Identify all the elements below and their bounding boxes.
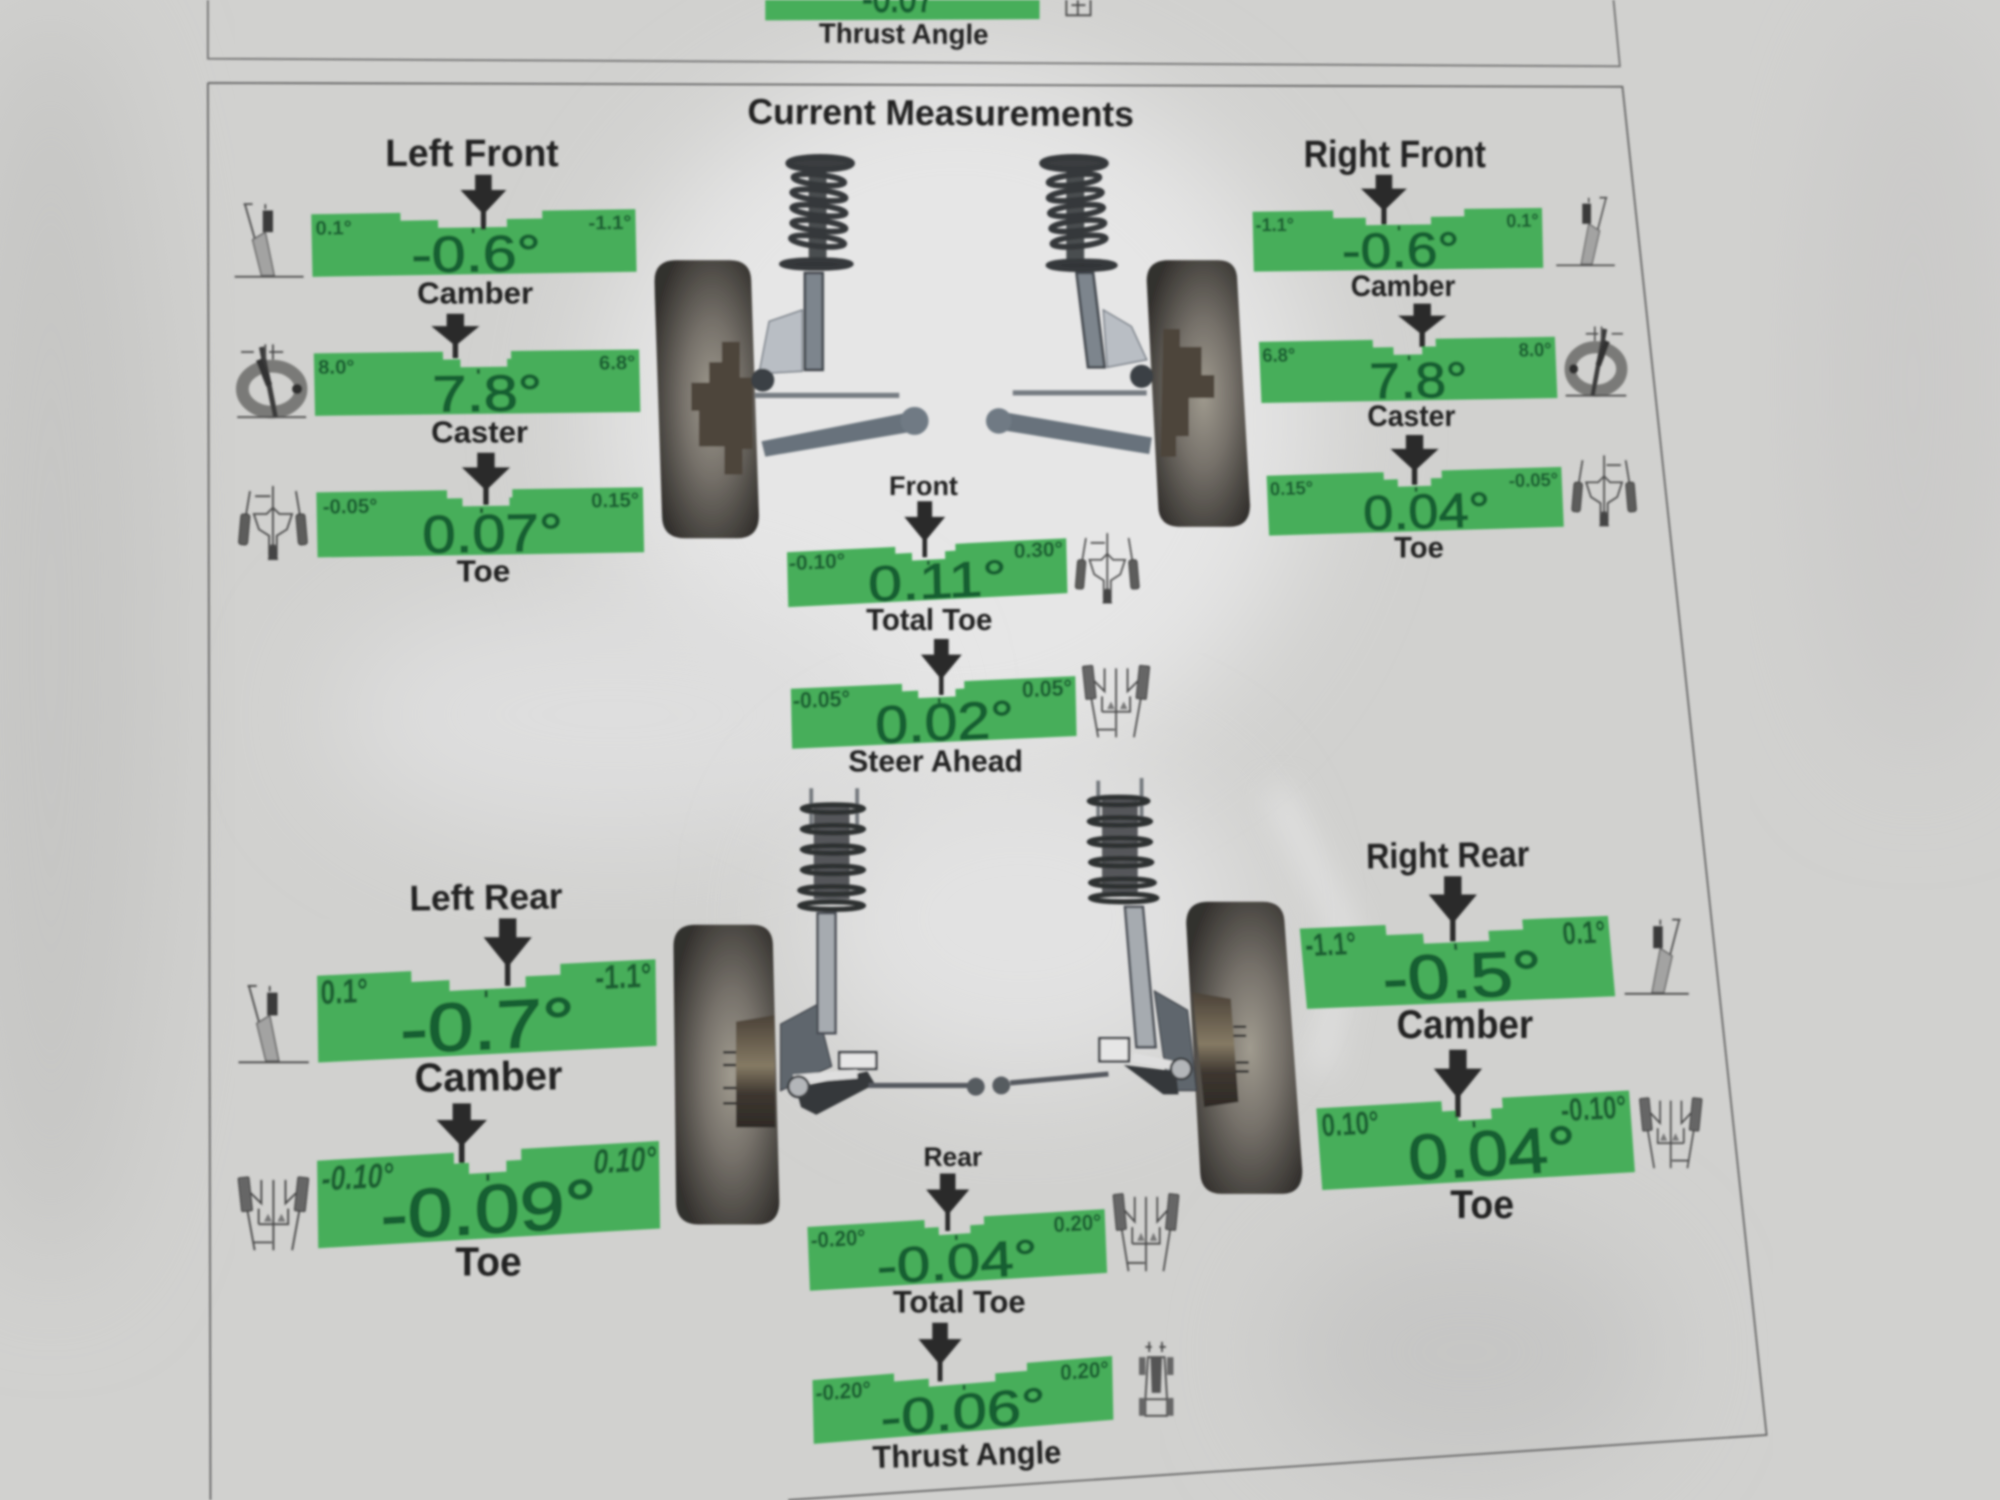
gauge: front total toe: -0.10° — [789, 550, 845, 575]
hub — [1161, 329, 1214, 457]
gauge: left front camber: -1.1° — [588, 212, 632, 234]
gauge: right rear toe — [1316, 1050, 1636, 1200]
knuckle — [1103, 310, 1147, 367]
label: toe: Toe — [457, 555, 510, 589]
icon: caster — [1566, 327, 1626, 396]
label: camber: Camber — [417, 277, 533, 311]
tyre — [673, 925, 779, 1224]
gauge: right rear toe: 0.10° — [1320, 1105, 1380, 1144]
gauge: left rear camber: -1.1° — [595, 956, 652, 997]
gauge: right front caster: 7.8° — [1369, 353, 1469, 409]
gauge: right rear camber — [1300, 876, 1616, 1017]
gauge: steer ahead: 0.05° — [1022, 675, 1072, 702]
gauge: left front toe — [316, 453, 644, 566]
heading: left front: Left Front — [385, 132, 559, 175]
bracket — [1099, 1038, 1129, 1061]
label: caster: Caster — [431, 416, 528, 450]
arrow — [918, 1323, 962, 1381]
icon: steer ahead — [1082, 665, 1150, 737]
gauge: front total toe: 0.30° — [1014, 538, 1063, 563]
gauge: rear total toe: -0.04° — [876, 1230, 1039, 1295]
heading: right front: Right Front — [1304, 133, 1486, 176]
knuckle — [1154, 991, 1196, 1091]
icon: front total toe — [1075, 533, 1139, 603]
gauge: rear total toe: 0.20° — [1053, 1211, 1102, 1237]
rear left suspension — [673, 788, 985, 1224]
gauge: right rear camber: 0.1° — [1561, 914, 1607, 951]
gauge: right front toe: -0.05° — [1508, 469, 1559, 491]
label: camber: Camber — [1351, 270, 1455, 303]
arrow — [436, 1103, 487, 1163]
label: toe: Toe — [1450, 1183, 1514, 1227]
gauge: steer ahead: 0.02° — [875, 690, 1015, 754]
icon: camber — [239, 986, 309, 1062]
brake drum — [1193, 992, 1239, 1107]
section: rear totals — [807, 1142, 1179, 1475]
strut — [818, 913, 835, 1033]
gauge: left front camber: 0.1° — [315, 217, 352, 240]
label: steer ahead: Steer Ahead — [848, 745, 1023, 779]
gauge: front total toe — [787, 501, 1068, 616]
arrow — [462, 453, 510, 505]
gauge: left front caster: 7.8° — [432, 364, 543, 422]
icon: rear total toe — [1113, 1194, 1179, 1271]
label: toe: Toe — [1394, 531, 1444, 564]
gauge: right rear camber: -0.5° — [1379, 937, 1546, 1014]
icon: cropped thrust angle car — [1066, 0, 1091, 15]
gauge: left front toe: -0.05° — [323, 496, 378, 519]
knuckle — [759, 310, 802, 374]
section: left front — [235, 132, 644, 589]
gauge: left rear camber: -0.7° — [400, 983, 575, 1068]
gauge: right rear camber: -1.1° — [1304, 926, 1358, 963]
joint — [751, 369, 774, 392]
label: cropped thrust angle: Thrust Angle — [819, 18, 989, 50]
section: right front — [1253, 133, 1637, 564]
tie rod — [755, 393, 899, 397]
spring — [800, 788, 864, 909]
spring — [782, 157, 852, 268]
gauge: rear total toe — [807, 1173, 1107, 1299]
arrow — [1361, 175, 1407, 225]
label: total toe: Total Toe — [893, 1283, 1026, 1319]
panel: previous measurements (cropped) — [208, 0, 1620, 66]
gauge: left rear camber: 0.1° — [320, 972, 368, 1012]
gauge: left front camber: -0.6° — [411, 224, 542, 283]
wheel studs — [1233, 1027, 1249, 1071]
arrow — [431, 314, 479, 358]
arrow — [460, 175, 506, 230]
section: left rear — [238, 876, 660, 1285]
gauge: right front camber — [1253, 175, 1543, 280]
tyre — [1147, 260, 1250, 527]
gauge: left front caster: 8.0° — [318, 357, 355, 379]
gauge: front total toe: 0.11° — [867, 550, 1007, 612]
label: camber: Camber — [1397, 1003, 1533, 1047]
icon: toe — [238, 1177, 309, 1250]
gauge: left rear toe: -0.10° — [321, 1155, 394, 1198]
gauge: right front caster: 8.0° — [1518, 339, 1552, 361]
lower arm — [986, 408, 1152, 454]
gauge: left rear camber — [317, 918, 657, 1072]
bracket — [839, 1052, 876, 1069]
gauge: right front toe: 0.04° — [1362, 483, 1491, 541]
label: toe: Toe — [455, 1239, 522, 1285]
arrow — [926, 1173, 969, 1231]
label: caster: Caster — [1367, 400, 1455, 433]
gauge: thrust angle: -0.06° — [880, 1378, 1046, 1447]
gauge: steer ahead — [791, 639, 1077, 758]
gauge: right front camber: -0.6° — [1341, 223, 1460, 279]
strut — [805, 273, 823, 370]
label: thrust angle: Thrust Angle — [872, 1434, 1062, 1475]
tyre — [654, 260, 759, 538]
section: front totals — [787, 471, 1150, 779]
brake drum — [736, 1015, 776, 1128]
arm highlight — [793, 1074, 857, 1079]
arrow — [1398, 304, 1446, 347]
gauge: left front caster — [314, 314, 641, 424]
gauge: right front camber: 0.1° — [1506, 209, 1539, 231]
gauge: rear total toe: -0.20° — [810, 1226, 866, 1253]
gauge: thrust angle: 0.20° — [1060, 1357, 1109, 1385]
pivot — [788, 1077, 809, 1097]
arrow — [484, 918, 532, 986]
arrow — [904, 501, 945, 557]
tie rod — [1013, 391, 1147, 395]
gauge: right rear toe: -0.10° — [1560, 1089, 1628, 1129]
icon: camber — [1556, 198, 1615, 265]
strut — [1077, 273, 1105, 367]
icon: thrust angle car — [1139, 1342, 1173, 1416]
heading: left rear: Left Rear — [409, 876, 563, 919]
title: Current Measurements — [747, 92, 1134, 134]
gauge: steer ahead: -0.05° — [793, 685, 850, 713]
heading: front: Front — [889, 471, 958, 501]
gauge: right front caster: 6.8° — [1262, 344, 1296, 366]
gauge: right front caster — [1259, 304, 1558, 411]
knuckle — [781, 1005, 832, 1091]
icon: toe — [1572, 455, 1637, 526]
gauge: left rear toe — [317, 1103, 660, 1258]
arrow — [1429, 876, 1477, 942]
gauge: left front caster: 6.8° — [599, 352, 636, 374]
hub — [691, 342, 753, 474]
gauge: left rear toe: -0.09° — [380, 1165, 597, 1255]
ball joint — [967, 1078, 985, 1096]
rear right suspension — [992, 778, 1302, 1194]
wheel studs — [723, 1052, 736, 1103]
arrow — [921, 639, 962, 695]
icon: camber — [235, 204, 304, 277]
arrow — [1434, 1050, 1482, 1117]
gauge: right rear toe: 0.04° — [1406, 1113, 1579, 1194]
gauge: left front camber — [311, 175, 637, 285]
front right suspension — [986, 157, 1250, 527]
gauge: cropped thrust angle value — [765, 0, 1040, 20]
icon: toe — [238, 486, 307, 560]
gauge: right front camber: -1.1° — [1255, 214, 1294, 235]
label: camber: Camber — [414, 1052, 563, 1101]
spring — [1089, 778, 1157, 902]
section: right rear — [1300, 834, 1702, 1227]
front left suspension — [654, 157, 929, 538]
gauge: right front toe — [1267, 435, 1564, 544]
icon: toe — [1640, 1098, 1702, 1168]
panel: current measurements — [208, 83, 1767, 1500]
control arm — [796, 1071, 875, 1115]
icon: camber — [1625, 920, 1689, 994]
icon: caster — [237, 344, 306, 417]
pivot — [1171, 1059, 1191, 1079]
tie rod — [869, 1083, 969, 1087]
label: total toe: Total Toe — [866, 603, 992, 637]
gauge: right front toe: 0.15° — [1269, 477, 1314, 499]
heading: rear: Rear — [923, 1142, 983, 1172]
heading: right rear: Right Rear — [1366, 834, 1530, 876]
gauge: thrust angle: -0.20° — [815, 1377, 871, 1406]
gauge: left rear toe: 0.10° — [593, 1139, 657, 1181]
joint — [1130, 365, 1153, 388]
gauge: left front toe: 0.15° — [591, 490, 639, 512]
gauge: left front toe: 0.07° — [422, 504, 564, 565]
gauge: thrust angle — [812, 1323, 1114, 1452]
strut — [1125, 907, 1156, 1047]
arrow — [1390, 435, 1439, 485]
spring — [1042, 157, 1115, 269]
tyre — [1186, 902, 1302, 1194]
control arm — [1124, 1065, 1179, 1094]
arm highlight — [1133, 1057, 1184, 1068]
ball joint — [992, 1077, 1010, 1094]
tie rod — [1010, 1074, 1108, 1083]
lower arm — [761, 407, 929, 457]
